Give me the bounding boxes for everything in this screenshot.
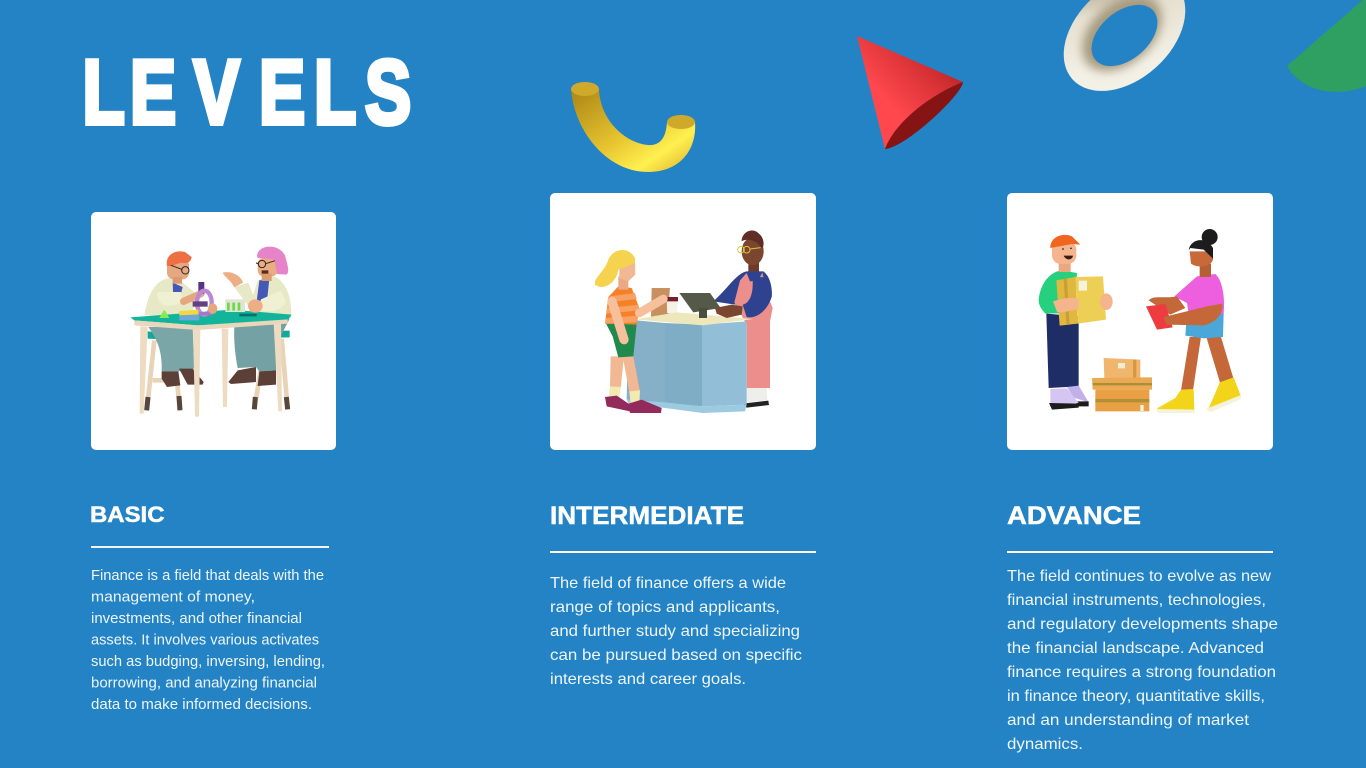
heading: advance: ADVANCE [1007,502,1141,530]
divider: advance [1007,551,1273,553]
text block: intermediate: interests and career goals. [550,671,746,688]
text block: basic: assets. It involves various activates [91,632,319,648]
card: basic illustration [91,212,336,450]
text block: intermediate: The field of finance offers a wide [550,575,786,592]
text block: advance [1007,568,1278,753]
text block: basic: borrowing, and analyzing financial [91,676,317,692]
divider: intermediate [550,551,816,553]
panel: basic [90,212,336,713]
heading: intermediate: INTERMEDIATE [550,502,744,530]
text block: basic: management of money, [91,590,255,606]
text block: advance: finance requires a strong foundation [1007,664,1276,681]
text block: advance: financial instruments, technologies, [1007,592,1266,609]
text block: advance: The field continues to evolve as new [1007,568,1271,585]
text block: advance: in finance theory, quantitative skills, [1007,688,1265,705]
decorative shape: cream torus [1064,0,1186,91]
decorative shape: yellow macaroni [571,82,695,172]
heading: basic: BASIC [90,502,164,527]
decorative shape: green half disc [1287,0,1366,92]
text block: basic: data to make informed decisions. [91,697,312,713]
text block: intermediate: can be pursued based on specific [550,647,802,664]
text block: advance: and regulatory developments shape [1007,616,1278,633]
illustration: two scientists at a table [130,247,292,417]
panel: intermediate [550,193,816,688]
text block: advance: the financial landscape. Advanced [1007,640,1264,657]
text block: basic: investments, and other financial [91,611,302,627]
text block: basic [91,568,325,713]
panel: advance [1007,193,1278,753]
divider: basic [91,546,329,548]
text block: basic: such as budging, inversing, lending, [91,654,325,670]
text block: advance: and an understanding of market [1007,712,1250,729]
illustration: courier delivering boxes [1039,229,1241,413]
decorative shape: red cone [857,36,963,149]
card: intermediate illustration [550,193,816,450]
text block: intermediate: range of topics and applicants, [550,599,780,616]
text block: basic: Finance is a field that deals with the [91,568,324,584]
text block: intermediate: and further study and specializing [550,623,800,640]
text block: advance: dynamics. [1007,736,1083,753]
text block: intermediate [550,575,802,688]
illustration: customer at a shop counter [595,230,773,413]
card: advance illustration [1007,193,1273,450]
title: LEVELS [83,42,411,144]
